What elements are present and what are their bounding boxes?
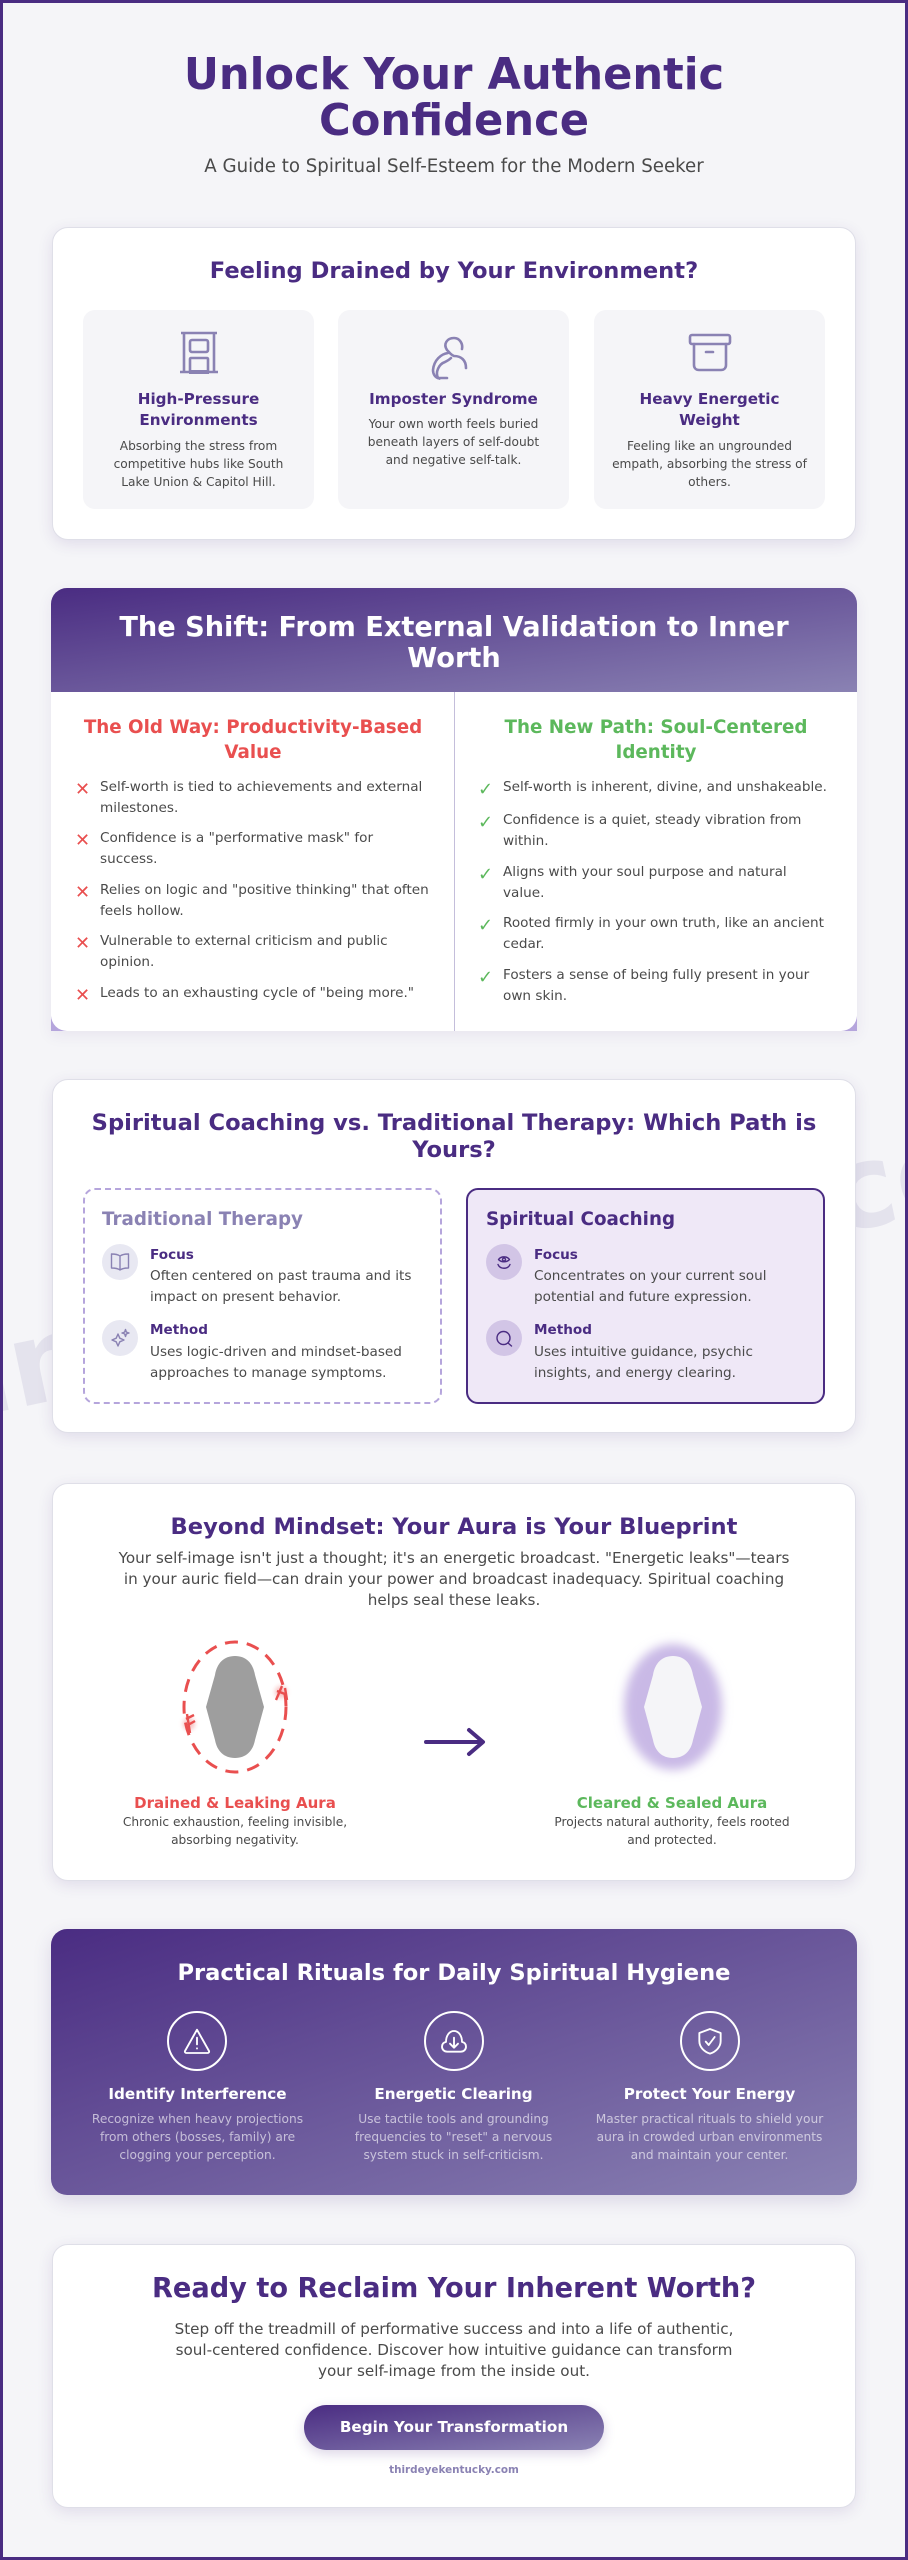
item: Self-worth is inherent, divine, and unshakeable.	[503, 779, 827, 795]
marker: cross: ✕	[75, 985, 90, 1006]
label: drained aura: Drained & Leaking Aura	[134, 1794, 336, 1812]
text: high-pressure: Lake Union & Capitol Hill.	[121, 475, 276, 489]
icon: person	[432, 336, 468, 380]
heading: the shift: Worth	[407, 643, 501, 674]
text: imposter: beneath layers of self-doubt	[368, 435, 539, 449]
marker: check: ✓	[478, 915, 493, 936]
heading: the shift	[119, 612, 789, 674]
heading: energetic clearing: Energetic Clearing	[374, 2085, 533, 2103]
heading: old way	[84, 717, 422, 763]
heading: heavy	[640, 390, 779, 429]
description	[150, 1268, 411, 1305]
text: call to action: soul-centered confidence. Discover how intuitive guidance can transform	[176, 2341, 732, 2359]
text: drained aura: absorbing negativity.	[171, 1833, 299, 1847]
heading: new path	[504, 717, 807, 763]
box: spiritual coaching	[466, 1188, 825, 1404]
text: aura intro: in your auric field—can drain your power and broadcast inadequacy. Spiritual coaching	[124, 1570, 784, 1588]
marker: check: ✓	[478, 864, 493, 885]
icon: magnifier	[486, 1320, 522, 1356]
item	[100, 933, 388, 970]
text: energetic clearing: system stuck in self-criticism.	[363, 2148, 544, 2162]
heading: call to action: Ready to Reclaim Your Inherent Worth?	[152, 2273, 756, 2304]
text: imposter	[368, 417, 539, 467]
heading: imposter: Imposter Syndrome	[369, 390, 538, 408]
text: identify interference: Recognize when heavy projections	[92, 2112, 303, 2126]
text: call to action: your self-image from the inside out.	[318, 2362, 590, 2380]
column: old way background	[51, 588, 454, 1031]
item: Vulnerable to external criticism and public	[100, 933, 388, 949]
text: energetic clearing	[355, 2112, 552, 2162]
item: Self-worth is tied to achievements and external	[100, 779, 422, 795]
text: imposter: Your own worth feels buried	[369, 417, 538, 431]
heading: aura blueprint: Beyond Mindset: Your Aura is Your Blueprint	[171, 1514, 737, 1540]
text: heavy: Feeling like an ungrounded	[627, 439, 792, 453]
header: the shift	[51, 588, 857, 692]
text: imposter: and negative self-talk.	[386, 453, 521, 467]
text: heavy: empath, absorbing the stress of	[612, 457, 807, 471]
text: call to action: Step off the treadmill of performative success and into a life of authentic,	[175, 2320, 733, 2338]
box: traditional therapy	[83, 1188, 442, 1404]
heading: coaching vs therapy: Spiritual Coaching vs. Traditional Therapy: Which Path is	[92, 1110, 816, 1136]
text: drained aura: Chronic exhaustion, feeling invisible,	[123, 1815, 347, 1829]
text: identify interference: clogging your perception.	[119, 2148, 276, 2162]
text: protect your energy: aura in crowded urban environments	[597, 2130, 822, 2144]
marker: check: ✓	[478, 779, 493, 800]
item: cedar.	[503, 936, 544, 952]
text: energetic clearing: frequencies to "reset" a nervous	[355, 2130, 552, 2144]
description: Concentrates on your current soul	[534, 1268, 767, 1284]
panel: feeling drained	[52, 227, 856, 540]
text: aura intro	[118, 1549, 789, 1609]
heading: identify interference: Identify Interference	[108, 2085, 287, 2103]
text: sealed aura	[554, 1815, 790, 1847]
panel: coaching vs therapy	[52, 1079, 856, 1433]
item	[100, 779, 422, 816]
diagram: sealed aura	[618, 1638, 728, 1776]
icon: eye	[486, 1244, 522, 1280]
text: coaching focus	[534, 1247, 767, 1305]
label: sealed aura: Cleared & Sealed Aura	[577, 1794, 767, 1812]
text: identify interference	[92, 2112, 303, 2162]
panel: practical rituals	[51, 1929, 857, 2195]
icon: archive box	[688, 334, 732, 372]
text: high-pressure	[114, 439, 283, 489]
panel: aura blueprint	[52, 1483, 856, 1881]
description: insights, and energy clearing.	[534, 1365, 736, 1381]
text: high-pressure: competitive hubs like South	[114, 457, 283, 471]
list: new path	[478, 779, 827, 1004]
item: success.	[100, 851, 158, 867]
icon: building	[180, 332, 218, 374]
text: protect your energy	[596, 2112, 824, 2162]
icon: warning	[167, 2011, 227, 2071]
heading: high-pressure: Environments	[139, 411, 258, 429]
subtitle: A Guide to Spiritual Self-Esteem for the Modern Seeker	[204, 156, 704, 177]
label: Method	[150, 1322, 208, 1338]
text: identify interference: from others (bosses, family) are	[100, 2130, 295, 2144]
icon: book	[102, 1244, 138, 1280]
link: website: thirdeyekentucky.com	[389, 2464, 519, 2476]
item	[503, 812, 801, 849]
marker: cross: ✕	[75, 779, 90, 800]
description	[534, 1344, 753, 1381]
heading: new path: Identity	[616, 742, 696, 763]
text: heavy: others.	[688, 475, 731, 489]
text: coaching method	[534, 1322, 753, 1381]
button: begin your transformation	[304, 2405, 604, 2450]
label: Focus	[534, 1247, 578, 1263]
item: feels hollow.	[100, 903, 184, 919]
label: Focus	[150, 1247, 194, 1263]
card: imposter syndrome	[338, 310, 569, 509]
icon: shield	[680, 2011, 740, 2071]
item	[100, 830, 374, 867]
item: Confidence is a "performative mask" for	[100, 830, 373, 846]
heading: coaching vs therapy: Yours?	[412, 1137, 496, 1163]
item: Leads to an exhausting cycle of "being more."	[100, 985, 414, 1001]
text: aura intro: helps seal these leaks.	[368, 1591, 540, 1609]
diagram: drained aura	[181, 1640, 289, 1774]
description	[150, 1344, 402, 1381]
heading: rituals: Practical Rituals for Daily Spiritual Hygiene	[177, 1960, 731, 1986]
text: therapy method	[150, 1322, 402, 1381]
text: therapy focus	[150, 1247, 411, 1305]
item	[503, 915, 824, 952]
title: Unlock Your Authentic	[184, 50, 724, 100]
text: heavy	[612, 439, 808, 489]
text: sealed aura: Projects natural authority, feels rooted	[554, 1815, 790, 1829]
item: milestones.	[100, 800, 178, 816]
panel: call to action	[52, 2244, 856, 2508]
list: old way	[75, 779, 429, 1006]
column: new path background	[454, 588, 857, 1031]
item: Fosters a sense of being fully present in your	[503, 967, 809, 983]
item	[100, 882, 429, 919]
heading: coaching vs therapy	[92, 1110, 816, 1163]
heading: heavy: Weight	[679, 411, 740, 429]
item: opinion.	[100, 954, 154, 970]
heading: the shift: The Shift: From External Validation to Inner	[119, 612, 789, 643]
text: sealed aura: and protected.	[627, 1833, 717, 1847]
arrow	[424, 1728, 486, 1756]
panel: the shift	[51, 588, 857, 1031]
icon: cloud download	[424, 2011, 484, 2071]
button: begin your transformation: Begin Your Transformation	[340, 2418, 568, 2436]
heading: traditional therapy: Traditional Therapy	[102, 1209, 303, 1230]
item: within.	[503, 833, 549, 849]
marker: check: ✓	[478, 812, 493, 833]
heading: high-pressure	[138, 390, 259, 429]
description: impact on present behavior.	[150, 1289, 341, 1305]
description	[534, 1268, 767, 1305]
text: protect your energy: and maintain your center.	[631, 2148, 788, 2162]
heading: old way: The Old Way: Productivity-Based	[84, 717, 422, 738]
heading: new path: The New Path: Soul-Centered	[505, 717, 807, 738]
heading: protect your energy: Protect Your Energy	[624, 2085, 795, 2103]
text: aura intro: Your self-image isn't just a thought; it's an energetic broadcast. "Energetic leaks"—tears	[119, 1549, 789, 1567]
item: Relies on logic and "positive thinking" that often	[100, 882, 429, 898]
text: high-pressure: Absorbing the stress from	[120, 439, 277, 453]
description: approaches to manage symptoms.	[150, 1365, 386, 1381]
card: high-pressure environments	[83, 310, 314, 509]
label: Method	[534, 1322, 592, 1338]
item: own skin.	[503, 988, 567, 1004]
item	[503, 967, 810, 1004]
marker: cross: ✕	[75, 882, 90, 903]
title	[184, 50, 724, 146]
description: Uses intuitive guidance, psychic	[534, 1344, 753, 1360]
icon: sparkles	[102, 1320, 138, 1356]
item: Aligns with your soul purpose and natural	[503, 864, 787, 880]
heading: feeling drained: Feeling Drained by Your Environment?	[210, 258, 698, 284]
text: protect your energy: Master practical rituals to shield your	[596, 2112, 823, 2126]
description: potential and future expression.	[534, 1289, 752, 1305]
title: Confidence	[319, 96, 589, 146]
item	[503, 864, 787, 901]
heading: spiritual coaching: Spiritual Coaching	[486, 1209, 675, 1230]
description: Often centered on past trauma and its	[150, 1268, 411, 1284]
heading: high-pressure: High-Pressure	[138, 390, 259, 408]
text: call to action	[0, 2319, 908, 2382]
card: heavy energetic weight	[594, 310, 825, 509]
item: value.	[503, 885, 544, 901]
item: Confidence is a quiet, steady vibration from	[503, 812, 801, 828]
marker: check: ✓	[478, 967, 493, 988]
marker: cross: ✕	[75, 933, 90, 954]
text: drained aura	[123, 1815, 347, 1847]
text: energetic clearing: Use tactile tools and grounding	[358, 2112, 549, 2126]
heading: heavy: Heavy Energetic	[640, 390, 779, 408]
marker: cross: ✕	[75, 830, 90, 851]
item: Rooted firmly in your own truth, like an ancient	[503, 915, 824, 931]
heading: old way: Value	[224, 742, 282, 763]
description: Uses logic-driven and mindset-based	[150, 1344, 402, 1360]
